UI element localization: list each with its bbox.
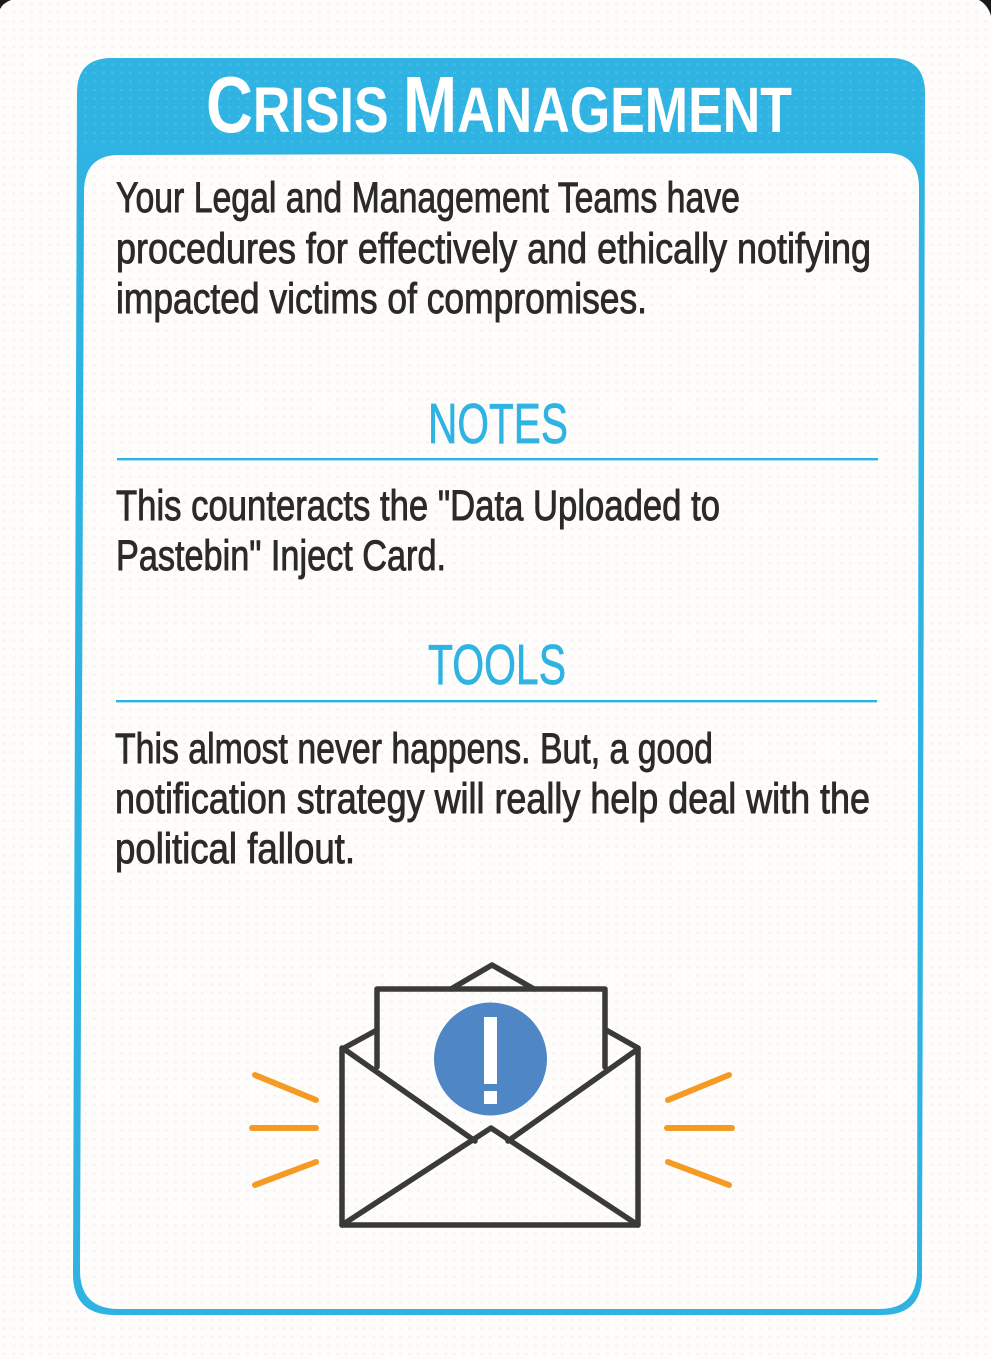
text block: notes: This counteracts the "Data Uploaded to: [116, 482, 720, 530]
title: CRISIS MANAGEMENT: [206, 60, 792, 149]
heading: notes: NOTES: [428, 392, 568, 456]
text block: notes: [116, 482, 720, 580]
text block: tools: This almost never happens. But, a good: [115, 725, 713, 773]
text block: description: [116, 174, 871, 323]
icon: orange alert rays: [252, 1075, 732, 1185]
text block: notes: Pastebin" Inject Card.: [116, 532, 446, 580]
icon: open envelope with alert: [252, 965, 732, 1225]
text block: tools: [115, 725, 870, 873]
text block: description: Your Legal and Management Teams have: [116, 174, 740, 222]
icon: alert circle: [434, 1002, 547, 1116]
panel: blue frame and header: [73, 58, 925, 1315]
text block: tools: political fallout.: [115, 825, 355, 873]
text block: description: impacted victims of compromises.: [116, 275, 647, 323]
heading: tools: TOOLS: [428, 633, 566, 697]
